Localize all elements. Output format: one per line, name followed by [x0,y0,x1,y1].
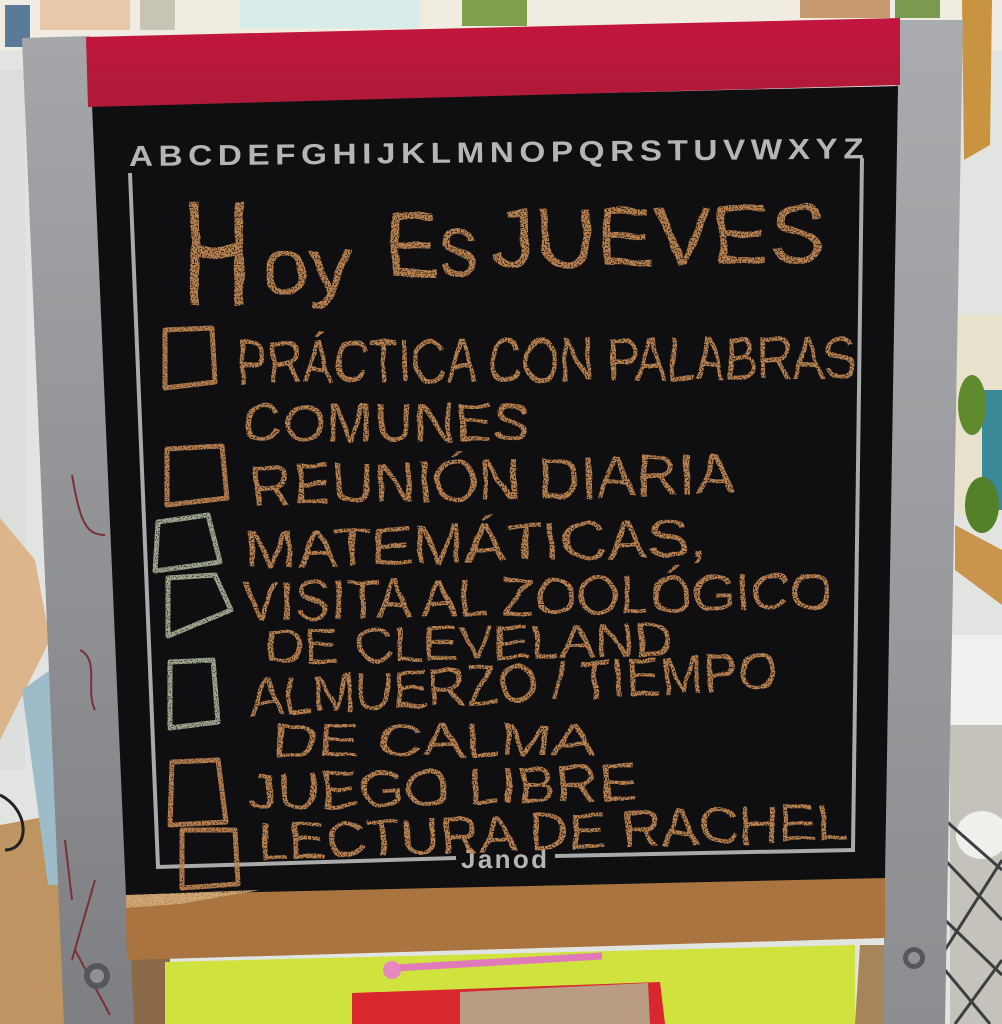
item: almuerzo tiempo de calma: ALMUERZO / TIEMPO [247,640,780,728]
red scratches on left post [65,475,110,1015]
item: reunion diaria: REUNIÓN DIARIA [249,441,735,519]
right shelf with books, plant and baskets [945,315,1002,1024]
item: visita al zoologico de cleveland: DE CLEVELAND [264,614,673,674]
bolts [84,947,925,989]
yellow tray [165,945,855,1024]
chalk heading: Es [385,195,480,297]
item: almuerzo tiempo de calma [247,640,780,766]
blackboard [92,86,898,895]
wooden ledge [125,870,885,960]
right grey post [883,20,963,1024]
chalk dust on ledge [126,890,260,908]
item: juego libre: JUEGO LIBRE [247,754,638,822]
red header [86,18,900,107]
left grey post [22,36,134,1024]
pink pencil [383,956,602,979]
brand logo: Janod [461,844,547,874]
chalk heading [182,169,827,337]
red eraser tray [352,982,665,1024]
checklist boxes [155,328,238,888]
item: visita al zoologico de cleveland: VISITA AL ZOOLÓGICO [242,562,833,632]
chalk heading: oy [262,221,352,310]
chalk heading: H [182,169,252,337]
item: practica con palabras comunes [236,324,856,453]
item: visita al zoologico de cleveland [242,562,833,674]
item: lectura de rachel: LECTURA DE RACHEL [256,793,848,872]
right wooden upright [962,0,992,160]
item: almuerzo tiempo de calma: DE CALMA [272,714,594,766]
chalk heading: JUEVES [491,186,827,286]
item: matematicas: MATEMÁTICAS, [244,508,707,580]
alphabet strip: ABCDEFGHIJKLMNOPQRSTUVWXYZ [129,132,864,172]
window sill objects [5,0,940,47]
left cloth and box [0,518,62,885]
board frame line [130,173,456,867]
item: practica con palabras comunes: COMUNES [242,393,530,453]
